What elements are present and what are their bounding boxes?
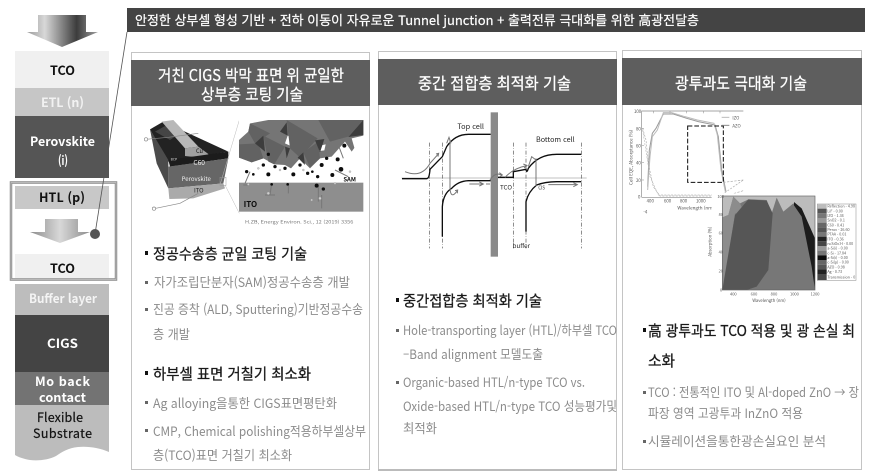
heading: panel 3: 광투과도 극대화 기술	[675, 70, 807, 94]
body text: panel 2	[396, 290, 617, 437]
chart: EQE and absorbance: -4	[643, 209, 648, 215]
illustration: solar cell device stack: BCP	[171, 156, 177, 161]
body text: panel 2: Oxide-based HTL/n-type TCO 성능평가및	[403, 396, 617, 415]
chart: EQE and absorbance: 400	[647, 199, 654, 205]
illustration: SAM and ITO inset	[239, 119, 363, 212]
panel: interlayer optimisation	[378, 52, 617, 470]
heading: panel 1	[131, 60, 370, 106]
heading: panel 2: 중간 접합층 최적화 기술	[418, 70, 571, 94]
chart: stacked absorption spectrum: AZO - 0.98	[827, 265, 845, 270]
illustration: solar cell device stack: ITO	[194, 185, 204, 194]
layer: Mo back contact	[15, 371, 109, 406]
highlighted tunnel junction frame	[11, 182, 116, 280]
layer: TCO top	[15, 51, 109, 88]
chart: band alignment diagram	[402, 112, 587, 257]
chart: stacked absorption spectrum: PTAA - 0.01	[827, 233, 846, 238]
chart: stacked absorption spectrum: ncSiOx:H - 0.00	[827, 242, 853, 247]
chart: EQE and absorbance: 60	[636, 144, 641, 150]
illustration: SAM and ITO inset: SAM	[343, 175, 356, 184]
body text: panel 1: 진공 증착 (ALD, Sputtering)기반정공수송	[153, 299, 363, 318]
chart: stacked absorption spectrum: Wavelength (nm)	[752, 297, 786, 304]
body text: panel 1: 하부셀 표면 거칠기 최소화	[153, 363, 311, 384]
body text: panel 2: 중간접합층 최적화 기술	[403, 290, 542, 311]
chart: stacked absorption spectrum: Transmission - 0	[827, 276, 855, 281]
chart: EQE and absorbance: 0	[638, 195, 641, 201]
chart: stacked absorption spectrum: 80	[719, 212, 723, 218]
body text: panel 3: 시뮬레이션을통한광손실요인 분석	[648, 431, 826, 450]
layer: Flexible Substrate: Flexible	[37, 407, 83, 426]
chart: stacked absorption spectrum: 40	[719, 250, 723, 256]
heading: panel 2	[378, 59, 617, 105]
layer stack column	[11, 15, 116, 460]
chart: EQE and absorbance: 20	[636, 178, 641, 184]
layer: Buffer layer: Buffer layer	[29, 288, 98, 307]
layer: CIGS: CIGS	[47, 333, 78, 352]
chart: stacked absorption spectrum	[707, 193, 858, 305]
layer: Perovskite	[15, 116, 109, 178]
chart: EQE and absorbance	[628, 109, 743, 215]
body text: panel 2: Hole-transporting layer (HTL)/하부셀 TCO	[403, 320, 617, 339]
chart: stacked absorption spectrum: 100	[717, 194, 724, 200]
body text: panel 1	[145, 243, 366, 464]
body text: panel 3: 소화	[648, 350, 675, 371]
body text: panel 2: 최적화	[403, 418, 437, 437]
body text: panel 1: CMP, Chemical polishing적용하부셀상부	[153, 421, 366, 440]
chart: stacked absorption spectrum: 20	[719, 269, 723, 275]
callout leader line	[90, 32, 127, 239]
chart: EQE and absorbance: AZO	[732, 123, 741, 129]
chart: stacked absorption spectrum: 0	[720, 287, 722, 293]
illustration: solar cell device stack	[144, 120, 354, 225]
layer: Buffer layer	[15, 284, 109, 315]
chart: EQE and absorbance: Cell EQE, Absorptance (%)	[628, 129, 635, 185]
layer: Perovskite: Perovskite	[30, 131, 95, 150]
layer: Mo back contact: contact	[39, 387, 87, 406]
illustration: solar cell device stack: C60	[193, 157, 205, 167]
chart: EQE and absorbance: Wavelength (nm)	[677, 204, 715, 211]
chart: stacked absorption spectrum: a-Si(i) - 0.00	[827, 247, 848, 252]
chart: band alignment diagram: buffer	[513, 241, 531, 250]
chart: stacked absorption spectrum: 1000	[790, 292, 799, 298]
chart: stacked absorption spectrum: Perov - 26.60	[827, 228, 850, 233]
chart: stacked absorption spectrum: c-Si - 17.84	[827, 251, 846, 256]
illustration: solar cell device stack: H.ZB, Energy Environ. Sci., 12 (2019) 3356	[245, 218, 354, 225]
layer: Mo back contact: Mo back	[35, 371, 90, 390]
layer: ETL	[15, 88, 109, 116]
chart: band alignment diagram: CIS	[538, 184, 545, 191]
layer: CIGS	[15, 315, 109, 372]
chart: band alignment diagram: TCO	[500, 182, 512, 191]
chart: stacked absorption spectrum: a-Si(i) - 0.00	[827, 256, 848, 261]
body text: panel 3: 파장 영역 고광투과 InZnO 적용	[648, 403, 803, 422]
body text: panel 1: 층(TCO)표면 거칠기 최소화	[153, 445, 292, 464]
panel: CIGS coating	[131, 52, 370, 470]
chart: EQE and absorbance: 80	[636, 126, 641, 132]
heading: panel 3	[622, 58, 862, 105]
layer: Flexible Substrate	[15, 405, 109, 460]
chart: stacked absorption spectrum: c-Si(p) - 0.00	[827, 261, 849, 266]
chart: stacked absorption spectrum: 600	[751, 292, 757, 298]
chart: EQE and absorbance: IZO	[732, 115, 739, 121]
body text: panel 3	[643, 320, 859, 450]
chart: stacked absorption spectrum: Ag - 0.73	[827, 270, 842, 275]
layer: TCO lower: TCO	[50, 258, 75, 277]
illustration: solar cell device stack: Perovskite	[182, 174, 212, 183]
body text: panel 1: 층 개발	[153, 324, 190, 343]
chart: stacked absorption spectrum: SnO2 - 0.1	[827, 219, 845, 224]
chart: band alignment diagram: Bottom cell	[536, 135, 575, 145]
body text: panel 1: 자가조립단분자(SAM)정공수송층 개발	[154, 272, 350, 291]
chart: stacked absorption spectrum: 1200	[811, 292, 820, 298]
layer: TCO top: TCO	[50, 60, 75, 79]
body text: panel 2: –Band alignment 모델도출	[403, 344, 543, 363]
chart: stacked absorption spectrum: 800	[771, 292, 777, 298]
chart: band alignment diagram: Top cell	[457, 122, 484, 132]
layer: ETL: ETL (n)	[41, 92, 84, 111]
chart: EQE and absorbance: 100	[634, 109, 642, 115]
icon: middle light arrow	[30, 219, 90, 243]
layer: Perovskite: (i)	[58, 150, 68, 169]
heading: panel 1: 거친 CIGS 박막 표면 위 균일한	[158, 62, 344, 86]
top summary banner: 안정한 상부셀 형성 기반 + 전하 이동이 자유로운 Tunnel junction + 출력전류 극대화를 위한 高광전달층	[135, 10, 699, 29]
chart: EQE and absorbance: 40	[636, 161, 641, 167]
chart: EQE and absorbance: 800	[680, 199, 688, 205]
chart: EQE and absorbance: 1000	[696, 199, 706, 205]
chart: stacked absorption spectrum: C60 - 0.41	[827, 223, 844, 228]
chart: stacked absorption spectrum: IZO - 1.34	[827, 214, 844, 219]
chart: stacked absorption spectrum: LiF - 0.00	[827, 209, 843, 214]
chart: stacked absorption spectrum: Absorption (%)	[707, 226, 714, 257]
body text: panel 3: 高 광투과도 TCO 적용 및 광 손실 최	[648, 320, 855, 341]
chart: stacked absorption spectrum: Reflection - 4.98	[827, 205, 855, 210]
heading: panel 1: 상부층 코팅 기술	[201, 81, 303, 105]
chart: EQE and absorbance: 600	[664, 199, 672, 205]
illustration: solar cell device stack: Cu	[196, 146, 203, 155]
icon: top light arrow	[27, 15, 98, 47]
chart: stacked absorption spectrum: 400	[730, 292, 737, 298]
illustration: SAM and ITO inset: ITO	[244, 199, 257, 210]
chart: stacked absorption spectrum: ITO - 0.36	[827, 237, 844, 242]
top summary banner	[127, 8, 865, 32]
chart: stacked absorption spectrum: 60	[719, 231, 723, 237]
layer: Flexible Substrate: Substrate	[33, 423, 92, 442]
body text: panel 2: Organic-based HTL/n-type TCO vs.	[403, 372, 585, 391]
body text: panel 1: Ag alloying을통한 CIGS표면평탄화	[153, 393, 337, 412]
body text: panel 1: 정공수송층 균일 코팅 기술	[153, 243, 307, 264]
layer: HTL: HTL (p)	[39, 187, 85, 206]
panel: transmittance maximisation	[622, 50, 862, 470]
